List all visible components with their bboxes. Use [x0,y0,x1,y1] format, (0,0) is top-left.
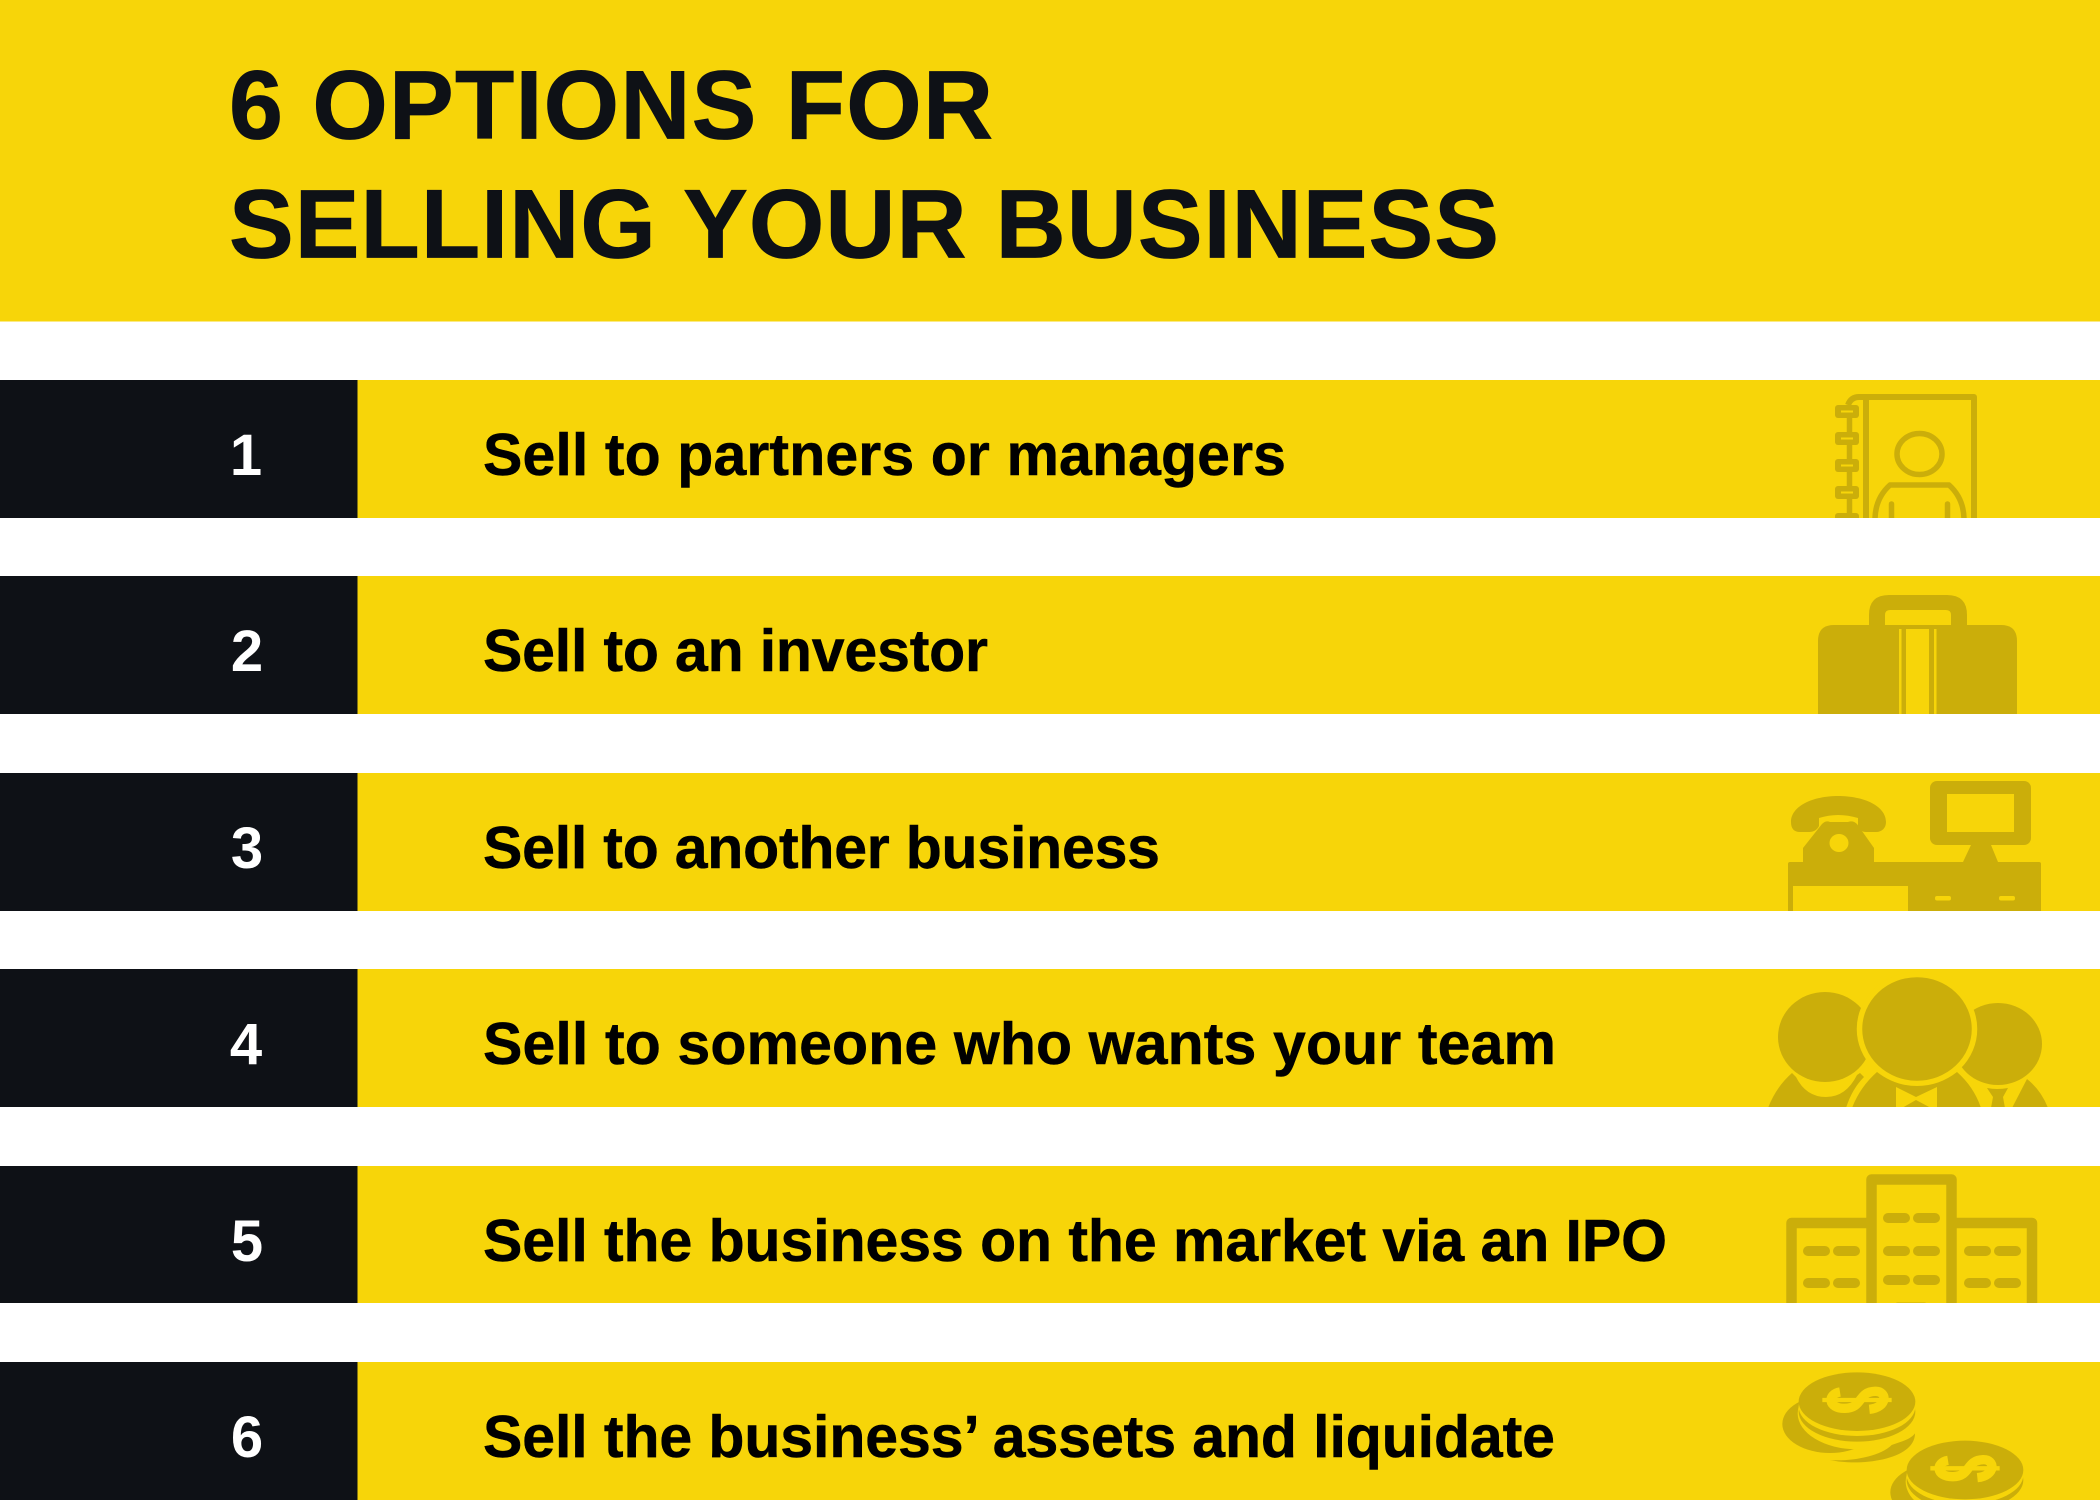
number badge 2 [0,576,358,714]
icon: coin stacks [1782,1372,2024,1500]
icon: contact book [1835,397,1974,526]
number badge 1 [0,380,358,518]
icon: team of people [1768,974,2048,1108]
text: option 5: Sell the business on the market via an IPO [483,1208,1667,1274]
number badge 6: 6 [231,1405,263,1470]
panel: option 2 [0,576,2100,720]
text: option 4: Sell to someone who wants your team [483,1011,1556,1077]
number badge 5: 5 [231,1209,263,1274]
text: option 3: Sell to another business [483,815,1160,881]
number badge 2: 2 [231,619,263,684]
text: option 6: Sell the business’ assets and liquidate [483,1404,1555,1470]
number badge 4: 4 [230,1012,262,1077]
icon: office buildings [1792,1180,2032,1312]
number badge 6 [0,1362,358,1500]
title [229,50,1499,278]
icon: desk with phone and monitor [1788,781,2041,915]
panel: option 3 [0,773,2100,915]
text: option 2: Sell to an investor [483,618,988,684]
panel: header [0,0,2100,322]
number badge 3: 3 [231,816,263,881]
panel: option 1 [0,380,2100,526]
panel: option 4 [0,969,2100,1108]
number badge 4 [0,969,358,1107]
panel: option 6 [0,1362,2100,1500]
icon: briefcase [1818,595,2017,720]
panel: option 5 [0,1166,2100,1312]
number badge 5 [0,1166,358,1303]
number badge 3 [0,773,358,911]
title: SELLING YOUR BUSINESS [229,170,1499,278]
title: 6 OPTIONS FOR [229,50,993,160]
number badge 1: 1 [230,423,262,488]
text: option 1: Sell to partners or managers [483,422,1286,488]
